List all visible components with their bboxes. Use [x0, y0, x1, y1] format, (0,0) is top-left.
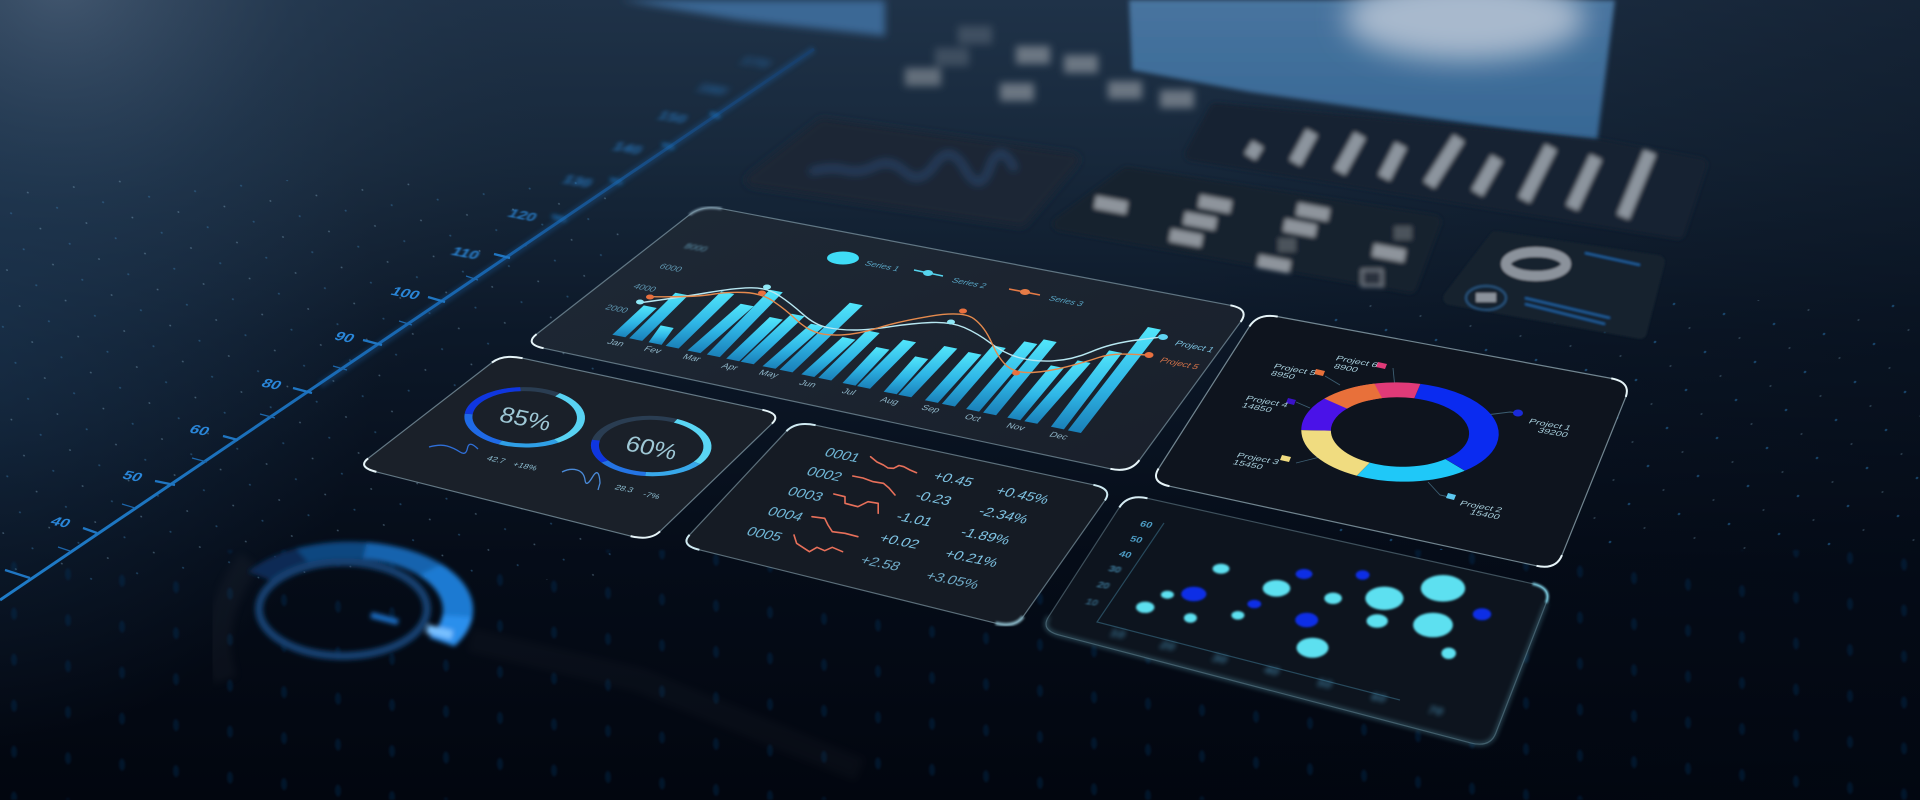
- month labels: Aug: [878, 395, 901, 406]
- value column: -1.01: [893, 510, 935, 530]
- series end labels: Project 5: [1158, 356, 1201, 371]
- donut labels: 15450: [1231, 458, 1265, 471]
- month labels: Mar: [681, 352, 703, 363]
- legend: [827, 252, 1086, 308]
- month labels: Sep: [919, 403, 942, 414]
- x axis labels: 20: [1157, 639, 1178, 653]
- ring 60 percent: [564, 402, 738, 490]
- ruler axis with scale labels: 100: [388, 284, 423, 303]
- series end labels: Project 1: [1173, 339, 1216, 354]
- donut labels: Project 2: [1458, 499, 1504, 514]
- month labels: Dec: [1047, 430, 1071, 441]
- ruler axis with scale labels: 130: [560, 172, 595, 191]
- donut labels: [1231, 354, 1573, 521]
- y axis labels: 4000: [631, 282, 658, 293]
- panel A background: [532, 208, 1244, 470]
- donut labels: Project 1: [1527, 417, 1573, 432]
- donut labels: Project 3: [1235, 451, 1281, 466]
- month labels: Fev: [642, 345, 664, 355]
- month labels: Jan: [605, 338, 627, 348]
- panel: main bar and line chart: [532, 208, 1244, 470]
- ring 85 percent: [438, 373, 611, 461]
- percent column: +0.45%: [992, 484, 1052, 507]
- x axis labels: 50: [1314, 677, 1335, 691]
- legend: Series 1: [863, 259, 902, 273]
- y axis labels: 40: [1117, 550, 1134, 561]
- y axis labels: [1083, 520, 1155, 609]
- y axis labels: 50: [1128, 535, 1145, 546]
- x axis labels: 40: [1261, 664, 1282, 678]
- legend: Series 2: [950, 276, 989, 290]
- percent column: -2.34%: [975, 505, 1031, 527]
- donut labels: Project 6: [1334, 354, 1380, 369]
- x axis labels: 60: [1368, 691, 1389, 705]
- y axis labels: 2000: [603, 303, 630, 314]
- row ids: 0004: [764, 505, 806, 525]
- line markers: [636, 284, 1168, 376]
- y axis labels: 20: [1095, 581, 1112, 592]
- sparkline and stats two: [562, 469, 663, 501]
- chart axes: [1097, 523, 1400, 700]
- panel: data table: [686, 424, 1107, 625]
- donut labels: 8900: [1332, 362, 1360, 374]
- ruler axis with scale labels: [0, 49, 814, 600]
- value column: +2.58: [857, 554, 903, 574]
- ring 85 percent: 85%: [496, 402, 555, 436]
- x axis labels: 70: [1425, 704, 1446, 718]
- donut labels: Project 4: [1244, 394, 1290, 409]
- percent column: +0.21%: [941, 547, 1001, 570]
- panel B background: [364, 357, 775, 538]
- panel: progress rings: [364, 357, 775, 538]
- month labels: Jul: [840, 387, 858, 397]
- panel E background: [1046, 497, 1548, 744]
- month labels: Jun: [797, 379, 819, 389]
- donut labels: 39200: [1536, 426, 1570, 439]
- sparkline and stats two: -7%: [641, 490, 663, 501]
- panel C background: [686, 424, 1107, 625]
- percent column: [922, 484, 1052, 592]
- month labels: Oct: [962, 413, 984, 423]
- blurred cluster of grey tiles: [905, 26, 1194, 108]
- ruler axis with scale labels: 40: [47, 514, 74, 531]
- blurred window: large blue screen with cloud: [1129, 0, 1615, 142]
- sparkline and stats one: +18%: [511, 460, 540, 472]
- y axis labels: 60: [1138, 520, 1155, 531]
- donut labels: 14850: [1240, 401, 1274, 414]
- bubbles: [1136, 564, 1491, 659]
- value column: +0.02: [876, 532, 922, 552]
- ring 60 percent: 60%: [622, 431, 681, 465]
- month labels: May: [757, 368, 781, 379]
- blurred panel: flow diagram: [1060, 174, 1434, 286]
- panel: donut chart: [1156, 316, 1627, 567]
- ruler axis with scale labels: 60: [186, 422, 213, 439]
- donut ring: [1268, 364, 1532, 500]
- row ids: [743, 446, 863, 545]
- blurred window: small blue screen: [620, 0, 885, 36]
- sparkline and stats one: [429, 444, 540, 472]
- bars: [612, 290, 1161, 433]
- legend: Series 3: [1047, 294, 1086, 308]
- ruler axis with scale labels: 110: [448, 245, 483, 263]
- sparkline and stats one: 42.7: [485, 454, 508, 465]
- ruler axis with scale labels: 160: [695, 80, 730, 99]
- y axis labels: 6000: [657, 262, 684, 273]
- panel: bubble chart: [1046, 497, 1548, 744]
- donut legend markers: [1280, 362, 1523, 500]
- ruler axis with scale labels: 50: [119, 468, 146, 485]
- month labels: [605, 338, 1071, 441]
- ruler axis with scale labels: 150: [655, 108, 690, 127]
- sparkline and stats two: 28.3: [613, 483, 636, 494]
- x axis labels: 30: [1209, 652, 1230, 666]
- y axis labels: 10: [1083, 598, 1100, 609]
- y axis labels: 8000: [682, 242, 709, 253]
- donut labels: 8950: [1269, 369, 1297, 381]
- value column: +0.45: [930, 470, 976, 490]
- ruler axis with scale labels: 140: [610, 139, 645, 158]
- y axis labels: 30: [1106, 565, 1123, 576]
- line series: project 1: [641, 288, 1164, 361]
- panel D background: [1156, 316, 1627, 567]
- blurred panel: wave chart: [753, 125, 1072, 220]
- series end labels: [1158, 339, 1216, 371]
- month labels: Nov: [1004, 421, 1028, 432]
- x axis labels: 10: [1107, 627, 1128, 641]
- dial gauge: [197, 525, 503, 695]
- ruler axis with scale labels: 170: [738, 53, 773, 72]
- row ids: 0001: [821, 446, 863, 466]
- ruler axis with scale labels: 120: [505, 206, 540, 225]
- y axis labels: [603, 242, 709, 314]
- row ids: 0003: [784, 485, 826, 505]
- month labels: Apr: [719, 362, 740, 372]
- blurred panel: small donut: [1450, 238, 1658, 332]
- ruler axis with scale labels: 80: [258, 376, 285, 393]
- percent column: +3.05%: [922, 569, 982, 592]
- donut labels: Project 5: [1272, 362, 1318, 377]
- value column: -0.23: [912, 489, 954, 509]
- row ids: 0005: [743, 525, 785, 545]
- ruler axis with scale labels: 90: [331, 329, 358, 346]
- row ids: 0002: [803, 465, 845, 485]
- red sparklines: [794, 457, 916, 552]
- blurred panel: bar chart: [1192, 110, 1700, 232]
- leader lines: [1296, 368, 1518, 497]
- value column: [857, 470, 976, 574]
- percent column: -1.89%: [957, 526, 1013, 548]
- line series: project 5: [650, 292, 1147, 373]
- x axis labels: [1107, 627, 1446, 718]
- donut labels: 15400: [1468, 508, 1502, 521]
